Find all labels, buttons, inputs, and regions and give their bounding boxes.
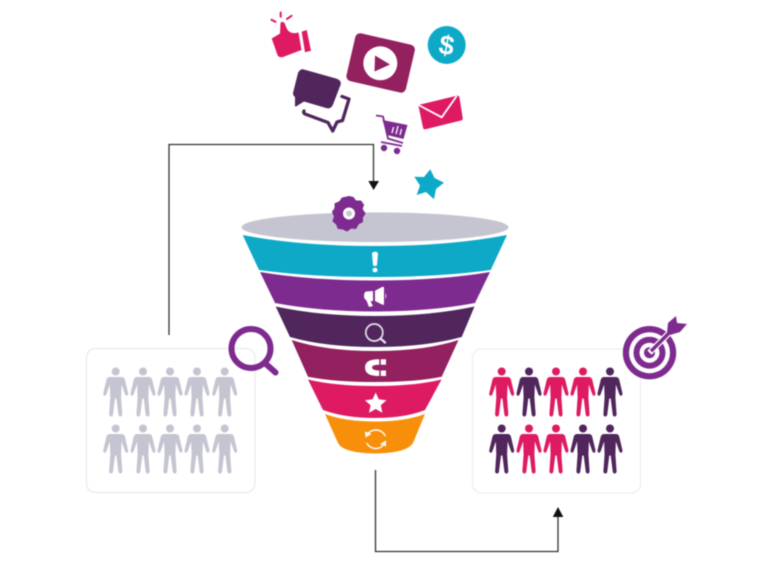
icon: shopping cart: [376, 116, 408, 154]
icon: video player: [345, 32, 416, 94]
icon: megaphone: [364, 287, 386, 307]
arrow: feedback loop into funnel: [169, 144, 379, 335]
icon: teal star: [414, 169, 444, 199]
icon: envelope: [418, 96, 463, 129]
icon: thumbs up: [272, 12, 311, 57]
icon: magnifier: [232, 329, 276, 372]
icon: star: [365, 392, 386, 413]
band 1: teal: [243, 235, 507, 277]
icon: refresh: [365, 430, 386, 448]
band 5: pink: [308, 380, 442, 418]
band 6: orange: [325, 414, 425, 454]
icon: exclamation: [372, 252, 378, 272]
panel: audience before: [86, 348, 255, 492]
icon: coloured people group: [489, 368, 622, 474]
band 4: magenta plum: [292, 340, 458, 382]
icon: search: [366, 324, 385, 342]
icon: magnet: [365, 359, 386, 376]
arrow: funnel output to customers: [376, 470, 563, 552]
funnel rim: [242, 212, 508, 242]
funnel: [242, 212, 508, 454]
icon: gear: [333, 197, 364, 230]
icon: grey people group: [103, 368, 237, 474]
band 2: purple: [260, 272, 490, 312]
icon: target with arrow: [623, 316, 687, 379]
icon: dollar coin: $: [437, 29, 457, 62]
panel: audience after: [472, 349, 640, 493]
icon: dollar coin: [428, 26, 466, 64]
click rays: [272, 12, 292, 22]
icon: chat bubbles: [293, 69, 349, 131]
band 3: dark plum: [276, 306, 474, 347]
